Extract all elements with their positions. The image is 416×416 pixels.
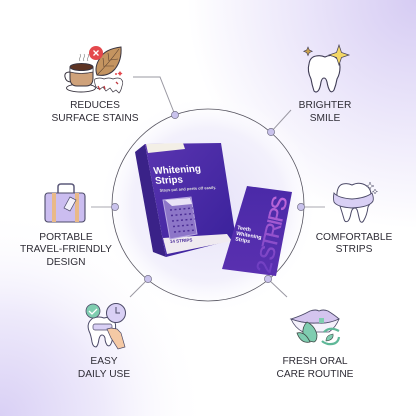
label: fresh oral care routine: FRESH ORAL xyxy=(282,356,348,367)
icon: tooth with strip xyxy=(334,182,378,222)
label: portable travel-friendly design: DESIGN xyxy=(46,257,86,268)
label: comfortable strips: COMFORTABLE xyxy=(316,232,393,243)
box strip count: 14 STRIPS xyxy=(170,237,193,244)
box text: Whitening xyxy=(153,164,202,177)
box text xyxy=(153,163,217,193)
label: fresh oral care routine: CARE ROUTINE xyxy=(277,369,354,380)
label: reduces surface stains: SURFACE STAINS xyxy=(52,113,139,124)
sachet large text: 2 STRIPS xyxy=(252,194,292,275)
icon: sparkling tooth xyxy=(304,45,349,92)
leader line: easy use xyxy=(130,275,152,297)
icon: coffee, leaf and stained teeth xyxy=(65,46,123,93)
product box xyxy=(135,143,236,257)
icon: tooth, check, clock and hand xyxy=(86,304,126,349)
sachet title: Teeth xyxy=(237,225,251,233)
leader line: brighter smile xyxy=(267,110,291,136)
label: comfortable strips: STRIPS xyxy=(336,244,373,255)
sachet xyxy=(222,186,292,276)
label: reduces surface stains: REDUCES xyxy=(70,100,120,111)
icon: suitcase xyxy=(45,184,85,222)
leader line: comfortable xyxy=(297,203,325,211)
leader line: portable xyxy=(91,203,119,211)
box text: Strips xyxy=(154,175,184,187)
sachet title: Whitening xyxy=(236,231,262,241)
label: portable travel-friendly design: PORTABLE xyxy=(39,232,93,243)
label: brighter smile: BRIGHTER xyxy=(299,100,351,111)
label: portable travel-friendly design: TRAVEL-FRIENDLY xyxy=(20,244,112,255)
label: brighter smile: SMILE xyxy=(310,113,340,124)
label: easy daily use: EASY xyxy=(90,356,118,367)
label: easy daily use: DAILY USE xyxy=(78,369,130,380)
sachet title: Strips xyxy=(235,236,251,245)
icon: lips, mint and cycle xyxy=(291,310,339,344)
box text: Stays put and peels off easily. xyxy=(159,185,217,193)
leader line: fresh care xyxy=(264,275,287,297)
leader line: surface stains xyxy=(133,77,179,119)
central ring xyxy=(112,109,304,301)
sachet title xyxy=(235,225,263,247)
